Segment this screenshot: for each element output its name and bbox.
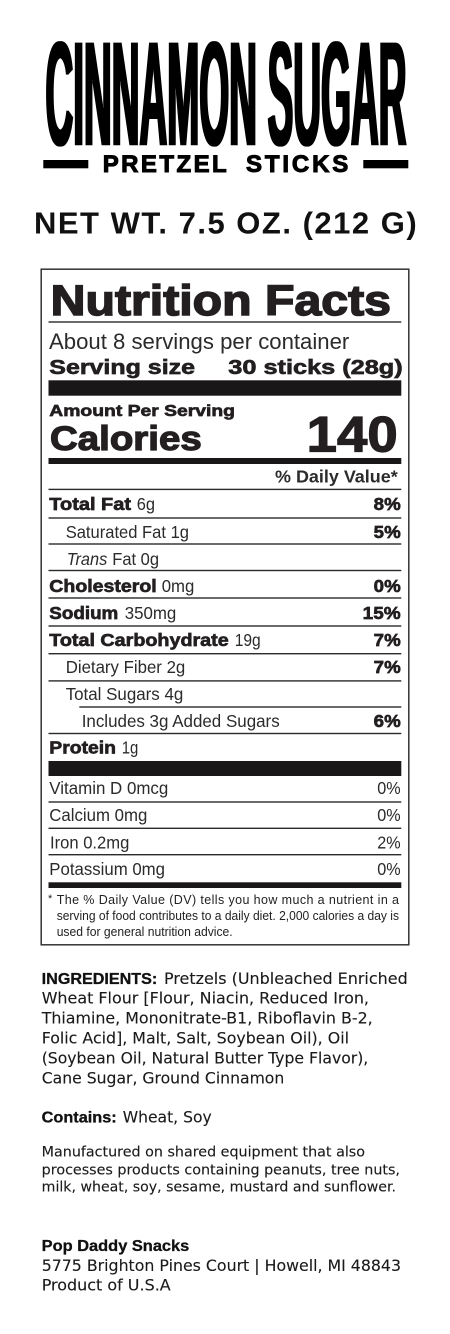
row: sodium bbox=[49, 603, 401, 623]
row: iron: Iron 0.2mg bbox=[50, 832, 129, 852]
row: potassium: Potassium 0mg bbox=[49, 859, 165, 879]
row: total sugars: Total Sugars 4g bbox=[66, 684, 183, 704]
row: total carbohydrate: 19g bbox=[235, 630, 261, 650]
row: iron bbox=[50, 832, 401, 852]
footnote: used for general nutrition advice. bbox=[57, 925, 233, 939]
net weight: NET WT. 7.5 OZ. (212 G) bbox=[34, 205, 417, 240]
row: trans fat: Trans bbox=[67, 549, 107, 569]
row: sodium: 15% bbox=[363, 603, 401, 623]
allergens: contains: Contains: bbox=[42, 1109, 117, 1126]
ingredients: INGREDIENTS: bbox=[42, 971, 157, 988]
shared equipment note: Manufactured on shared equipment that also bbox=[42, 1145, 365, 1161]
row: calcium: Calcium 0mg bbox=[49, 805, 147, 825]
row: cholesterol: 0mg bbox=[162, 576, 194, 596]
row: total fat: 6g bbox=[137, 494, 155, 514]
row: calcium bbox=[49, 805, 401, 825]
row: trans fat bbox=[67, 549, 159, 569]
row: dietary fiber: 7% bbox=[374, 657, 401, 677]
servings per container: About 8 servings per container bbox=[49, 329, 349, 354]
ingredients: Wheat Flour [Flour, Niacin, Reduced Iron, bbox=[42, 988, 369, 1007]
subtitle with side bars: PRETZEL bbox=[103, 151, 227, 178]
serving size: Serving size bbox=[49, 357, 195, 379]
row: total carbohydrate bbox=[49, 630, 401, 650]
row: cholesterol: Cholesterol bbox=[49, 576, 157, 596]
row: total fat bbox=[49, 494, 401, 514]
company address: Pop Daddy Snacks bbox=[42, 1238, 189, 1255]
row: dietary fiber: Dietary Fiber 2g bbox=[66, 657, 185, 677]
ingredients: Folic Acid], Malt, Salt, Soybean Oil), Oil bbox=[42, 1028, 349, 1047]
row: saturated fat bbox=[66, 522, 401, 542]
row: saturated fat: Saturated Fat 1g bbox=[66, 522, 189, 542]
row: vitamin d: Vitamin D 0mcg bbox=[49, 778, 168, 798]
company address: 5775 Brighton Pines Court | Howell, MI 48843 bbox=[42, 1256, 401, 1275]
shared equipment note: processes products containing peanuts, tree nuts, bbox=[42, 1162, 400, 1178]
row: vitamin d bbox=[49, 778, 401, 798]
footnote: The % Daily Value (DV) tells you how much a nutrient in a bbox=[57, 893, 399, 907]
row: total fat: 8% bbox=[374, 494, 401, 514]
row: added sugars: Includes 3g Added Sugars bbox=[82, 711, 280, 731]
row: calcium: 0% bbox=[377, 805, 401, 825]
amount per serving: Amount Per Serving bbox=[49, 403, 235, 420]
row: potassium bbox=[49, 859, 401, 879]
allergens: contains bbox=[42, 1107, 212, 1126]
serving size: 30 sticks (28g) bbox=[228, 357, 403, 379]
row: protein bbox=[49, 737, 138, 757]
panel: nutrition facts bbox=[41, 269, 409, 945]
footnote: * bbox=[48, 893, 53, 905]
subtitle with side bars: STICKS bbox=[246, 151, 348, 178]
row: dietary fiber bbox=[66, 657, 401, 677]
row: iron: 2% bbox=[377, 832, 401, 852]
row: trans fat: Fat 0g bbox=[112, 549, 159, 569]
subtitle with side bars bbox=[43, 151, 408, 178]
row: vitamin d: 0% bbox=[377, 778, 401, 798]
row: cholesterol bbox=[49, 576, 401, 596]
ingredients bbox=[41, 969, 408, 1087]
shared equipment note bbox=[42, 1145, 400, 1195]
serving size bbox=[49, 357, 403, 379]
row: sodium: Sodium bbox=[49, 603, 118, 623]
allergens: contains: Wheat, Soy bbox=[123, 1107, 212, 1126]
row: sodium: 350mg bbox=[125, 603, 176, 623]
shared equipment note: milk, wheat, soy, sesame, mustard and sunflower. bbox=[42, 1179, 396, 1195]
row: total carbohydrate: 7% bbox=[374, 630, 401, 650]
footnote bbox=[48, 893, 399, 939]
calories: 140 bbox=[307, 406, 398, 462]
row: saturated fat: 5% bbox=[374, 522, 401, 542]
ingredients: Pretzels (Unbleached Enriched bbox=[164, 969, 408, 988]
row: total fat: Total Fat bbox=[49, 494, 131, 514]
calories bbox=[50, 406, 398, 462]
row: protein: Protein bbox=[49, 737, 116, 757]
row: protein: 1g bbox=[122, 737, 138, 757]
company address bbox=[42, 1238, 401, 1295]
row: added sugars bbox=[82, 711, 401, 731]
row: added sugars: 6% bbox=[374, 711, 401, 731]
ingredients: Thiamine, Mononitrate-B1, Riboflavin B-2, bbox=[41, 1008, 373, 1027]
daily value header: % Daily Value* bbox=[275, 466, 398, 486]
row: potassium: 0% bbox=[377, 859, 401, 879]
calories: Calories bbox=[50, 420, 202, 458]
heading: nutrition facts: Nutrition Facts bbox=[51, 277, 391, 325]
ingredients: (Soybean Oil, Natural Butter Type Flavor), bbox=[42, 1048, 368, 1067]
row: cholesterol: 0% bbox=[374, 576, 401, 596]
company address: Product of U.S.A bbox=[42, 1276, 171, 1295]
footnote: serving of food contributes to a daily diet. 2,000 calories a day is bbox=[57, 909, 399, 923]
row: total carbohydrate: Total Carbohydrate bbox=[49, 630, 229, 650]
ingredients: Cane Sugar, Ground Cinnamon bbox=[42, 1068, 284, 1087]
